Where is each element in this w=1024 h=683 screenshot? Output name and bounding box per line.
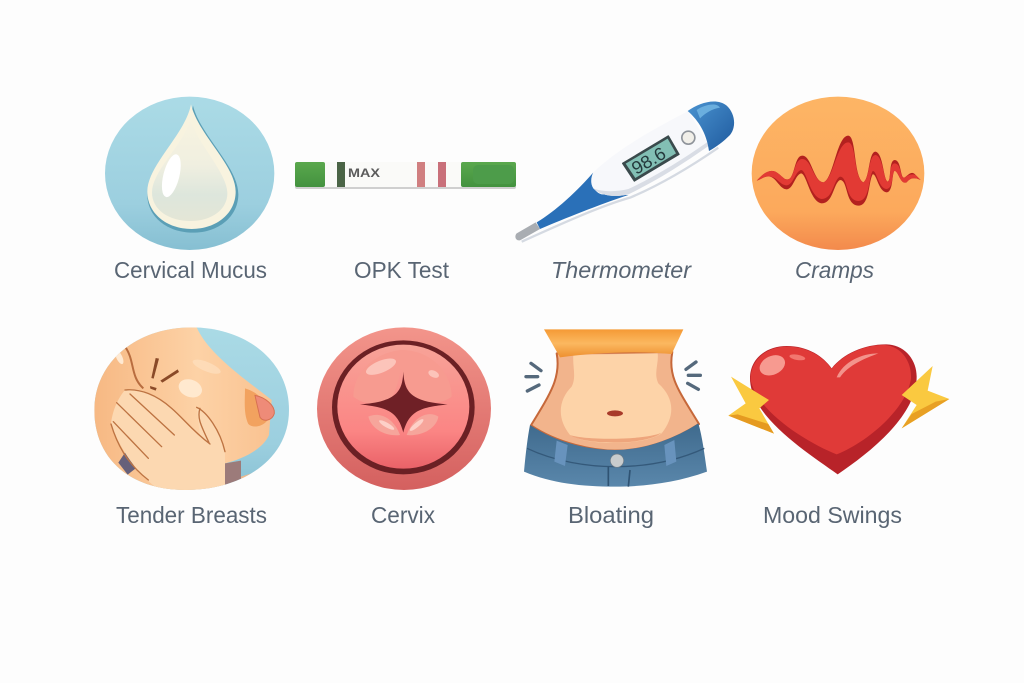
icon: mucus drop xyxy=(105,97,274,250)
icon: bloated belly xyxy=(524,329,707,487)
icon: heart with lightning xyxy=(728,344,949,474)
panel: cramps xyxy=(752,97,924,283)
label: bloating: Bloating xyxy=(568,502,654,528)
label: thermometer: Thermometer xyxy=(551,257,692,283)
icon: hand on breast xyxy=(94,328,289,490)
panel: bloating xyxy=(524,329,707,528)
panel: cervix xyxy=(317,327,491,528)
icon: pain wave xyxy=(752,97,924,250)
infographic: fertility signs icon grid xyxy=(94,96,950,528)
panel: thermometer xyxy=(515,102,734,283)
icon: digital thermometer: 98.6 xyxy=(628,143,669,178)
label: tender breasts: Tender Breasts xyxy=(116,502,267,528)
panel: OPK test xyxy=(295,162,516,283)
panel: tender breasts xyxy=(94,328,289,523)
panel: cervical mucus xyxy=(105,97,274,283)
label: cramps: Cramps xyxy=(795,257,874,283)
label: cervix: Cervix xyxy=(371,502,435,528)
icon: cervix xyxy=(317,327,491,490)
label: cervical mucus: Cervical Mucus xyxy=(114,257,267,283)
label: OPK test: OPK Test xyxy=(354,257,450,283)
icon: digital thermometer xyxy=(515,102,734,242)
panel: mood swings xyxy=(728,344,949,528)
label: mood swings: Mood Swings xyxy=(763,502,902,528)
icon: test strip xyxy=(295,162,516,189)
icon: test strip: MAX xyxy=(348,168,380,180)
